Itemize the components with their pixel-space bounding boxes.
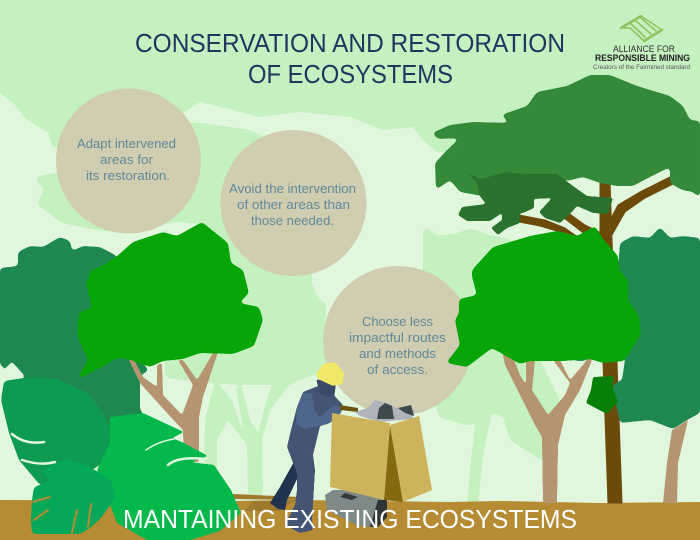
jaguar xyxy=(458,172,613,235)
circle: adapt intervened areas: Adapt intervened xyxy=(77,136,176,151)
tree: right teal canopy xyxy=(571,227,700,503)
arm xyxy=(296,393,341,429)
leaf: bright xyxy=(97,413,241,540)
canopy xyxy=(76,222,263,380)
circle: choose less impactful routes: impactful routes xyxy=(349,330,447,345)
small leaf on trunk xyxy=(586,376,618,414)
body xyxy=(285,386,343,533)
canopy xyxy=(446,226,641,367)
circle: avoid the intervention: Avoid the intervention xyxy=(229,181,356,196)
back leg xyxy=(270,460,298,510)
circle: choose less impactful routes xyxy=(323,266,473,416)
circle: choose less impactful routes: of access. xyxy=(367,362,428,377)
logo: RESPONSIBLE MINING xyxy=(595,53,690,64)
canopy xyxy=(432,75,700,198)
monstera leaves xyxy=(1,377,241,540)
handle xyxy=(340,405,358,412)
circle: choose less impactful routes: Choose less xyxy=(362,314,433,329)
tree: left xyxy=(0,222,263,462)
logo: ALLIANCE FOR xyxy=(613,44,675,54)
title: OF ECOSYSTEMS xyxy=(248,59,453,89)
logo: Creators of the Fairmined standard xyxy=(593,65,690,71)
teal canopy xyxy=(0,237,149,440)
tree: large canopy with brown trunk xyxy=(432,75,700,503)
circle: avoid the intervention: of other areas than xyxy=(237,197,350,212)
logo xyxy=(593,16,690,71)
background foliage xyxy=(33,122,560,503)
tree: right bright green xyxy=(446,226,641,503)
leaf: small xyxy=(31,459,116,534)
circle: adapt intervened areas: its restoration. xyxy=(86,168,170,183)
light gap xyxy=(0,362,24,386)
head xyxy=(316,379,336,398)
circle: adapt intervened areas xyxy=(56,88,201,234)
cart base xyxy=(325,490,387,528)
title xyxy=(135,28,565,89)
rocks xyxy=(355,400,415,422)
trunk xyxy=(502,350,592,503)
cart box xyxy=(330,413,390,500)
ground xyxy=(0,494,700,540)
title: CONSERVATION AND RESTORATION xyxy=(135,28,565,58)
circle: choose less impactful routes: and methods xyxy=(359,346,437,361)
icon: logo mark xyxy=(621,16,662,41)
miner pushing cart xyxy=(270,362,432,533)
circle: avoid the intervention: those needed. xyxy=(251,213,334,228)
trunk xyxy=(128,352,218,462)
circle: adapt intervened areas: areas for xyxy=(100,152,154,167)
leaf: dark xyxy=(1,377,111,485)
footer heading: MANTAINING EXISTING ECOSYSTEMS xyxy=(123,506,577,534)
helmet xyxy=(316,362,344,386)
trunk xyxy=(519,176,675,503)
circle: avoid the intervention xyxy=(220,130,366,276)
